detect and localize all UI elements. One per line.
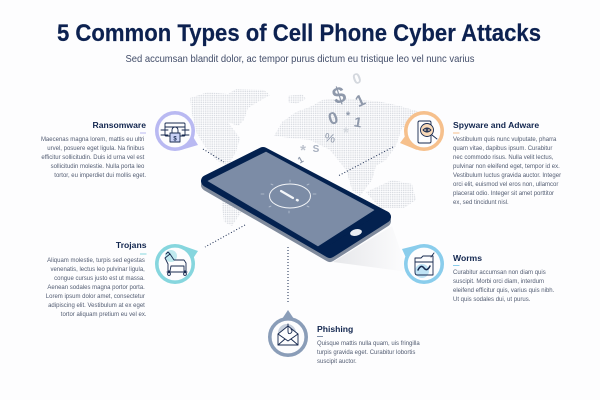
trojans body: Aliquam molestie, turpis sed egestas bbox=[47, 258, 145, 264]
floating symbols: 1 bbox=[296, 154, 305, 165]
trojans body: venenatis, lectus leo pulvinar ligula, bbox=[50, 267, 145, 273]
spyware body: orci elit, euismod vel eros non, ullamcor bbox=[453, 182, 558, 188]
worms body: suscipit. Morbi orci diam, interdum bbox=[453, 279, 544, 285]
icon: phone with magnifier bbox=[418, 121, 437, 143]
icon: folder with worm bbox=[415, 253, 434, 278]
worms body: Ut quis sodales dui, ut purus. bbox=[453, 297, 531, 303]
icon: envelope with hook bbox=[278, 324, 298, 345]
trojans body: adipiscing elit. Vestibulum at ex eget bbox=[48, 303, 145, 309]
spyware badge bbox=[400, 113, 442, 150]
trojans body: tortor aliquam pretium eu vel ex. bbox=[61, 312, 147, 318]
spyware body: placerat odio. Integer sit amet porttitor bbox=[453, 191, 554, 197]
ransomware body: tortor, eu imperdiet dui mollis eget. bbox=[54, 173, 146, 179]
worms body: eleifend efficitur quis, varius quis nibh. bbox=[453, 288, 555, 294]
icon: trojan horse bbox=[165, 250, 187, 275]
floating symbols: * bbox=[346, 110, 351, 122]
phone bbox=[207, 152, 385, 256]
floating symbols: $ bbox=[329, 81, 349, 109]
spyware body: Vestibulum luctus gravida auctor. Integer bbox=[453, 173, 561, 179]
ransomware body: sollicitudin molestie. Nulla porta leo bbox=[51, 164, 145, 170]
phishing body: turpis gravida eget. Curabitur lobortis bbox=[317, 350, 415, 356]
title: 5 Common Types of Cell Phone Cyber Attacks bbox=[57, 20, 541, 47]
trojans body: Aenean sodales magna portor porta. bbox=[47, 285, 145, 291]
floating symbols: S bbox=[313, 144, 320, 155]
ransomware body: efficitur sollicitudin. Duis id urna vel est bbox=[41, 155, 145, 161]
spyware body: nec commodo risus. Nulla velit lectus, bbox=[453, 155, 554, 161]
spyware body: quam vitae, dapibus ipsum. Curabitur bbox=[453, 146, 552, 152]
worms badge bbox=[402, 245, 442, 282]
panel: spyware and adware bbox=[400, 113, 563, 206]
ransomware badge bbox=[157, 113, 198, 150]
phishing body: suscipit auctor. bbox=[317, 359, 357, 365]
floating symbols: 1 bbox=[353, 92, 368, 111]
dotted connector lines bbox=[203, 147, 398, 302]
trojans body: Lorem ipsum dolor amet, consectetur bbox=[46, 294, 145, 300]
ransomware heading: Ransomware bbox=[92, 120, 146, 130]
floating symbols: * bbox=[300, 142, 306, 159]
trojans body: congue cursus justo est ut massa. bbox=[54, 276, 145, 282]
floating symbols: 0 bbox=[326, 108, 341, 129]
icon: locked screen bbox=[161, 123, 189, 142]
floating symbols: * bbox=[343, 124, 349, 140]
panel: phishing bbox=[270, 310, 421, 365]
trojans heading: Trojans bbox=[116, 240, 147, 250]
trojans badge bbox=[157, 245, 198, 282]
spyware heading: Spyware and Adware bbox=[453, 120, 539, 130]
subtitle: Sed accumsan blandit dolor, ac tempor purus dictum eu tristique leo vel nunc varius bbox=[126, 54, 474, 65]
phone home button bbox=[349, 228, 363, 237]
panel: worms bbox=[402, 245, 556, 303]
phone screen bbox=[208, 152, 374, 246]
floating symbols: 1 bbox=[353, 113, 363, 131]
panel: ransomware bbox=[41, 113, 198, 179]
floating symbols bbox=[296, 70, 368, 165]
ransomware body: urvel, posuere eget ligula. Na finibus bbox=[47, 146, 144, 152]
alert icon bbox=[261, 180, 316, 213]
spyware body: pulvinar non eleifend eget, tempor id ex. bbox=[453, 164, 560, 170]
floating symbols: 0 bbox=[350, 70, 364, 88]
worms heading: Worms bbox=[453, 253, 482, 263]
floating symbols: % bbox=[324, 130, 337, 146]
icon: locked screen: $ bbox=[173, 136, 177, 142]
spyware body: ex, sed tincidunt nisl. bbox=[453, 200, 509, 206]
phone shadow bbox=[333, 226, 408, 272]
dotted world map bbox=[190, 89, 420, 226]
ransomware body: Maecenas magna lorem, mattis eu ultri bbox=[41, 137, 144, 143]
phishing heading: Phishing bbox=[317, 324, 353, 334]
spyware body: Vestibulum quis nunc vulputate, pharra bbox=[453, 137, 557, 143]
phishing body: Quisque mattis nulla quam, uis fringilla bbox=[317, 341, 420, 347]
phishing badge bbox=[270, 310, 306, 355]
panel: trojans bbox=[46, 240, 198, 318]
worms body: Curabitur accumsan non diam quis bbox=[453, 270, 546, 276]
